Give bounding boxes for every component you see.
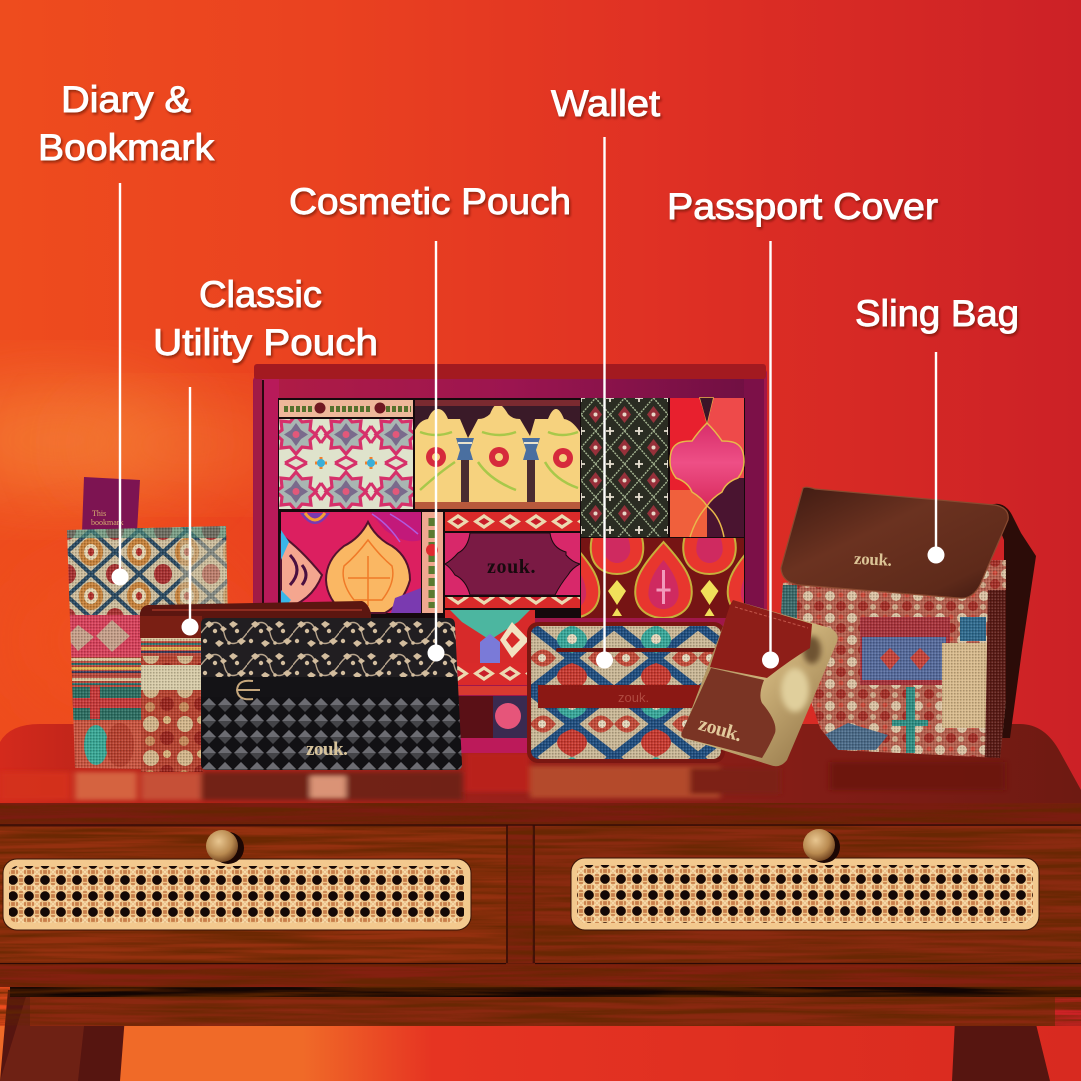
wallet zip xyxy=(556,648,716,652)
table reflections xyxy=(0,752,1005,800)
box panel: teal ornament xyxy=(445,610,535,663)
label: diary and bookmark: Bookmark xyxy=(38,127,215,168)
wallet strap xyxy=(538,685,703,708)
passport red flap xyxy=(710,600,812,678)
gift box xyxy=(253,364,767,753)
label: wallet: Wallet xyxy=(551,83,661,124)
box lid band xyxy=(254,364,766,379)
passport gold panel xyxy=(681,600,838,766)
drawer frame xyxy=(0,825,1081,987)
box panel: zouk label xyxy=(445,533,580,595)
left drawer xyxy=(0,827,506,963)
labels xyxy=(38,79,1019,363)
callout: sling bag xyxy=(928,352,944,564)
stretcher xyxy=(30,997,1055,1026)
box panel: zig strips xyxy=(445,512,580,685)
box panel: tiles xyxy=(279,419,413,509)
wallet logo: zouk. xyxy=(618,690,649,705)
bookmark: This xyxy=(92,509,106,518)
buckle xyxy=(237,681,260,699)
belt xyxy=(201,677,463,698)
passport logo: zouk. xyxy=(696,713,744,746)
lower rail edge xyxy=(0,964,1081,987)
table legs xyxy=(0,990,1050,1081)
sling strap xyxy=(990,504,1036,738)
wallet xyxy=(527,622,725,763)
box panel: dark lattice xyxy=(581,398,668,537)
label: classic utility pouch: Classic xyxy=(199,274,322,315)
table top xyxy=(0,724,1081,810)
box panel: dark floral xyxy=(445,686,530,753)
pouch fabric xyxy=(141,638,203,772)
right drawer xyxy=(535,826,1081,963)
callout: wallet xyxy=(596,137,613,668)
box panel: arches xyxy=(415,400,580,509)
box body xyxy=(253,364,767,752)
cane panel left xyxy=(3,859,471,930)
passport cover xyxy=(681,600,838,766)
sling body xyxy=(775,560,1015,760)
diary cover xyxy=(60,524,230,772)
floral panel xyxy=(201,617,463,678)
wallet fabric xyxy=(531,626,721,759)
label: diary and bookmark: Diary & xyxy=(61,79,191,120)
bookmark: bookmark xyxy=(91,518,123,527)
box panel: ogee arches xyxy=(281,512,443,613)
knob left xyxy=(206,830,244,864)
cosmetic pouch xyxy=(201,617,463,771)
table xyxy=(0,724,1081,1081)
classic utility pouch xyxy=(140,601,371,772)
box panel: pink arch xyxy=(670,398,744,537)
woven panel xyxy=(201,697,463,771)
passport brown panel xyxy=(681,668,775,758)
box panel: border strip xyxy=(279,400,413,417)
label: classic utility pouch: Utility Pouch xyxy=(153,322,378,363)
sling logo: zouk. xyxy=(854,549,892,570)
callout: cosmetic pouch xyxy=(428,241,444,662)
box panel: paisley xyxy=(581,538,744,618)
callout: diary xyxy=(112,183,128,586)
divider post xyxy=(508,825,532,963)
label: passport cover: Passport Cover xyxy=(667,186,938,227)
label: cosmetic pouch: Cosmetic Pouch xyxy=(289,181,571,222)
front rail xyxy=(0,803,1081,825)
callout: utility pouch xyxy=(182,387,198,636)
pouch leather top xyxy=(140,601,371,640)
wallet shell xyxy=(527,622,725,763)
pouch logo: zouk. xyxy=(306,739,347,760)
box inner band xyxy=(262,379,760,399)
box logo: zouk. xyxy=(487,556,536,578)
label: sling bag: Sling Bag xyxy=(855,293,1019,334)
knob right xyxy=(803,829,840,863)
callout: passport xyxy=(762,241,779,668)
cane panel right xyxy=(571,858,1039,930)
wood grain xyxy=(0,803,1081,1026)
sling bag xyxy=(775,487,1036,760)
sling flap xyxy=(781,487,1008,598)
bookmark xyxy=(82,477,140,532)
diary and bookmark xyxy=(60,477,230,772)
callout lines and dots xyxy=(112,137,944,668)
shadow gap xyxy=(10,987,1081,997)
